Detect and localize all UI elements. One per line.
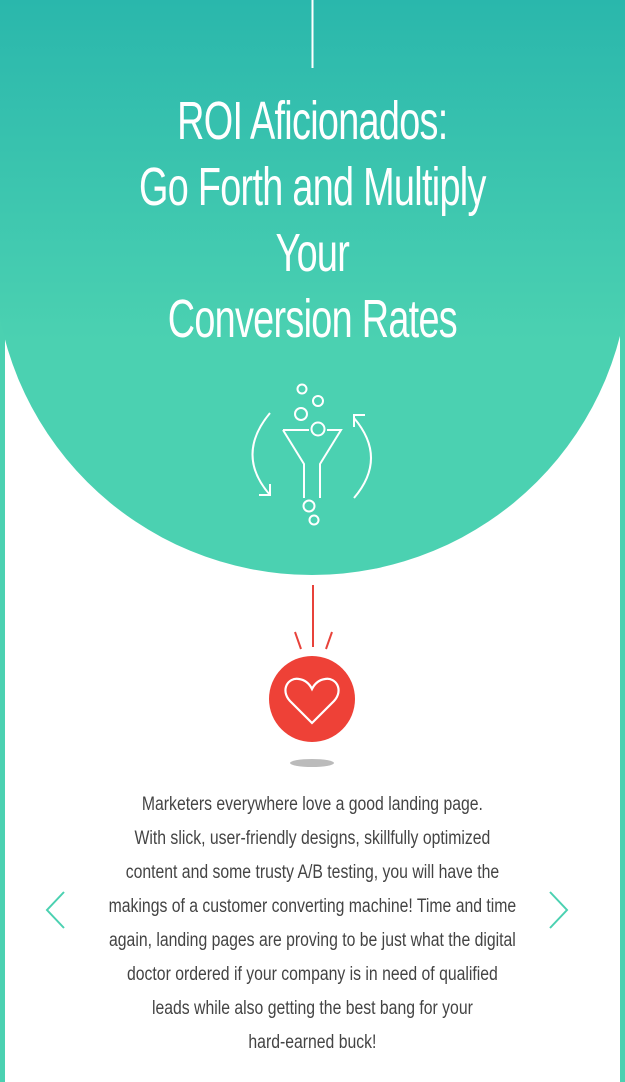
- title: Go Forth and Multiply: [139, 157, 486, 217]
- arrow: red line to heart: [294, 585, 333, 650]
- icon: funnel: [251, 384, 372, 526]
- body text: [109, 794, 516, 1053]
- body text: again, landing pages are proving to be just what the digital: [109, 930, 516, 951]
- body text: doctor ordered if your company is in need of qualified: [127, 964, 498, 985]
- title: ROI Aficionados:: [177, 91, 448, 151]
- title: [139, 91, 486, 349]
- body text: Marketers everywhere love a good landing page.: [142, 794, 483, 815]
- title: Your: [276, 223, 349, 283]
- body text: content and some trusty A/B testing, you will have the: [126, 862, 499, 883]
- icon: heart: [269, 656, 355, 767]
- arrow: left: [46, 891, 65, 929]
- body text: hard-earned buck!: [248, 1032, 376, 1053]
- body text: leads while also getting the best bang for your: [152, 998, 473, 1019]
- arrow: right: [549, 891, 568, 929]
- title: Conversion Rates: [168, 289, 457, 349]
- header background: [0, 0, 625, 575]
- body text: With slick, user-friendly designs, skillfully optimized: [135, 828, 490, 849]
- body text: makings of a customer converting machine! Time and time: [109, 896, 516, 917]
